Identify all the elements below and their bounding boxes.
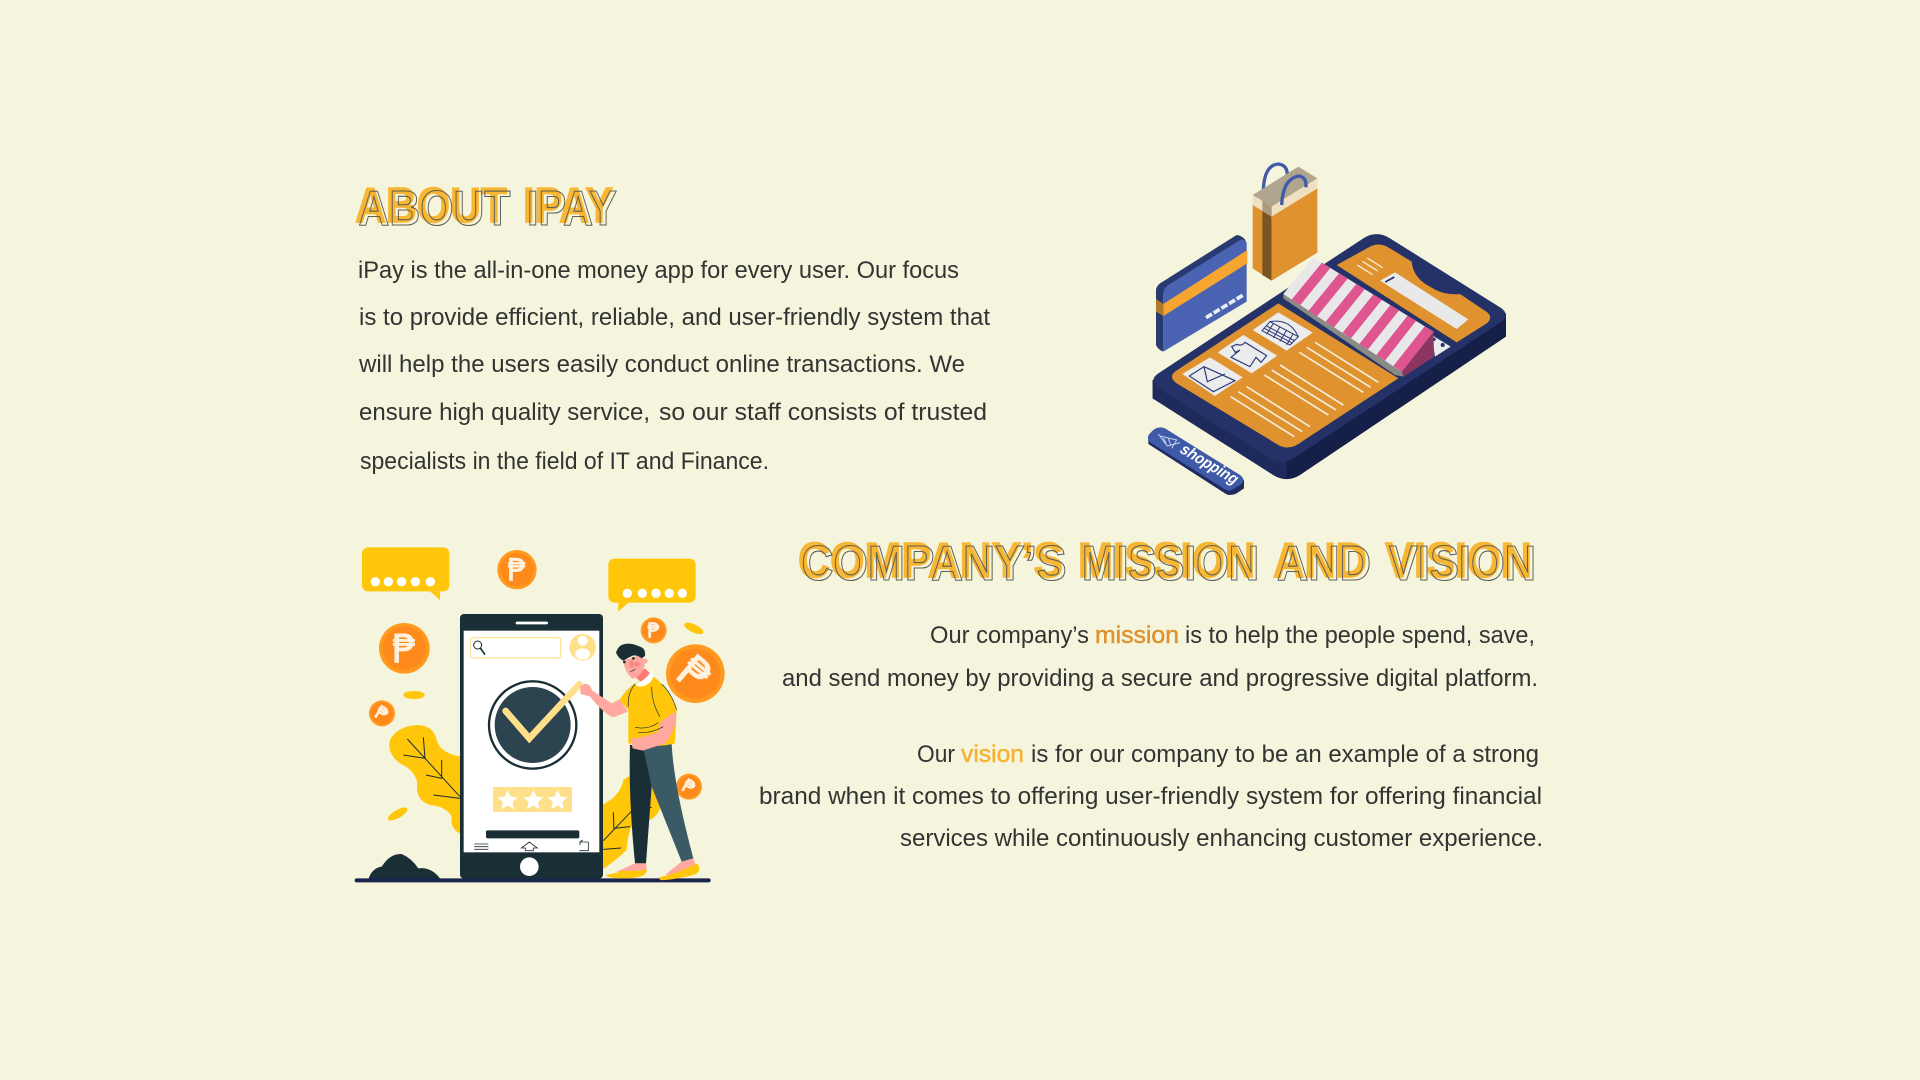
credit card <box>1156 235 1247 352</box>
text block: mission statement: is to help the people spend, save, <box>1185 622 1535 649</box>
label: shopping: shopping <box>1176 441 1243 488</box>
text block: about iPay paragraph: so our staff consists of trusted <box>659 399 987 426</box>
coins: ₱ <box>392 627 417 673</box>
text block: vision statement: vision <box>961 741 1024 768</box>
bush <box>368 854 441 879</box>
text block: mission statement <box>782 622 1538 692</box>
icon: basket <box>1262 321 1298 345</box>
coins: ₱ <box>507 554 527 589</box>
heading: About iPay: ABOUT <box>358 182 511 236</box>
rating stars <box>493 787 572 812</box>
coins: ₱ <box>667 645 723 704</box>
text block: about iPay paragraph: is to provide efficient, reliable, and user-friendly system that <box>359 304 990 331</box>
text block: vision statement <box>759 741 1543 852</box>
illustration: phone payment with person <box>355 547 725 882</box>
orange product list panel <box>1172 303 1398 448</box>
heading: About iPay: IPAY <box>527 182 617 236</box>
coins: ₱ <box>371 702 392 726</box>
phone <box>460 614 603 879</box>
person <box>580 644 699 880</box>
check mark badge <box>489 681 579 769</box>
heading: company's mission and vision: AND <box>1277 537 1371 591</box>
coins: ₱ <box>678 776 699 800</box>
heading: company's mission and vision <box>798 534 1536 591</box>
speech bubble: left <box>362 547 449 600</box>
speech bubble: right <box>608 559 696 612</box>
search bar <box>470 638 561 658</box>
card under awning <box>1432 335 1451 357</box>
text block: vision statement: is for our company to be an example of a strong <box>1031 741 1539 768</box>
heading: company's mission and vision: VISION <box>1389 537 1536 591</box>
ground line <box>355 878 711 882</box>
phone body <box>1153 234 1506 479</box>
coins <box>369 550 725 823</box>
heading: About iPay: IPAY <box>523 179 613 233</box>
heading: company's mission and vision: AND <box>1273 534 1367 588</box>
text block: mission statement: mission <box>1095 622 1179 649</box>
heading: About iPay <box>355 179 617 236</box>
left leaf <box>389 725 462 834</box>
heading: company's mission and vision: MISSION <box>1082 537 1259 591</box>
avatar <box>569 634 596 661</box>
text block: about iPay paragraph: specialists in the field of IT and Finance. <box>360 448 769 475</box>
nav icons <box>474 840 588 851</box>
heading: company's mission and vision: COMPANY’S <box>798 534 1063 588</box>
right leaf <box>602 776 662 870</box>
heading: company's mission and vision: MISSION <box>1078 534 1255 588</box>
text block: mission statement: and send money by providing a secure and progressive digital platform. <box>782 665 1538 692</box>
text block: about iPay paragraph <box>358 257 990 475</box>
shopping tag <box>1148 427 1244 495</box>
text block: vision statement: brand when it comes to offering user-friendly system for offering financial <box>759 783 1542 810</box>
text block: about iPay paragraph: will help the users easily conduct online transactions. We <box>358 351 965 378</box>
illustration: isometric shopping phone <box>1148 164 1506 495</box>
shopping bag <box>1253 164 1317 281</box>
top orange search panel <box>1337 245 1490 342</box>
icon: envelope <box>1189 367 1235 392</box>
icon: shirt <box>1231 342 1267 367</box>
text block: about iPay paragraph: ensure high quality service, <box>359 399 650 426</box>
icon: cart <box>1158 434 1180 448</box>
text block: vision statement: services while continuously enhancing customer experience. <box>900 825 1543 852</box>
coins: ₱ <box>647 619 660 643</box>
heading: company's mission and vision: COMPANY’S <box>802 537 1066 591</box>
heading: company's mission and vision: VISION <box>1385 534 1532 588</box>
text block: vision statement: Our <box>917 741 955 768</box>
text block: mission statement: Our company’s <box>930 622 1089 649</box>
heading: About iPay: ABOUT <box>355 179 507 233</box>
text block: about iPay paragraph: iPay is the all-in-one money app for every user. Our focus <box>358 257 959 284</box>
pink striped awning <box>1283 257 1434 377</box>
